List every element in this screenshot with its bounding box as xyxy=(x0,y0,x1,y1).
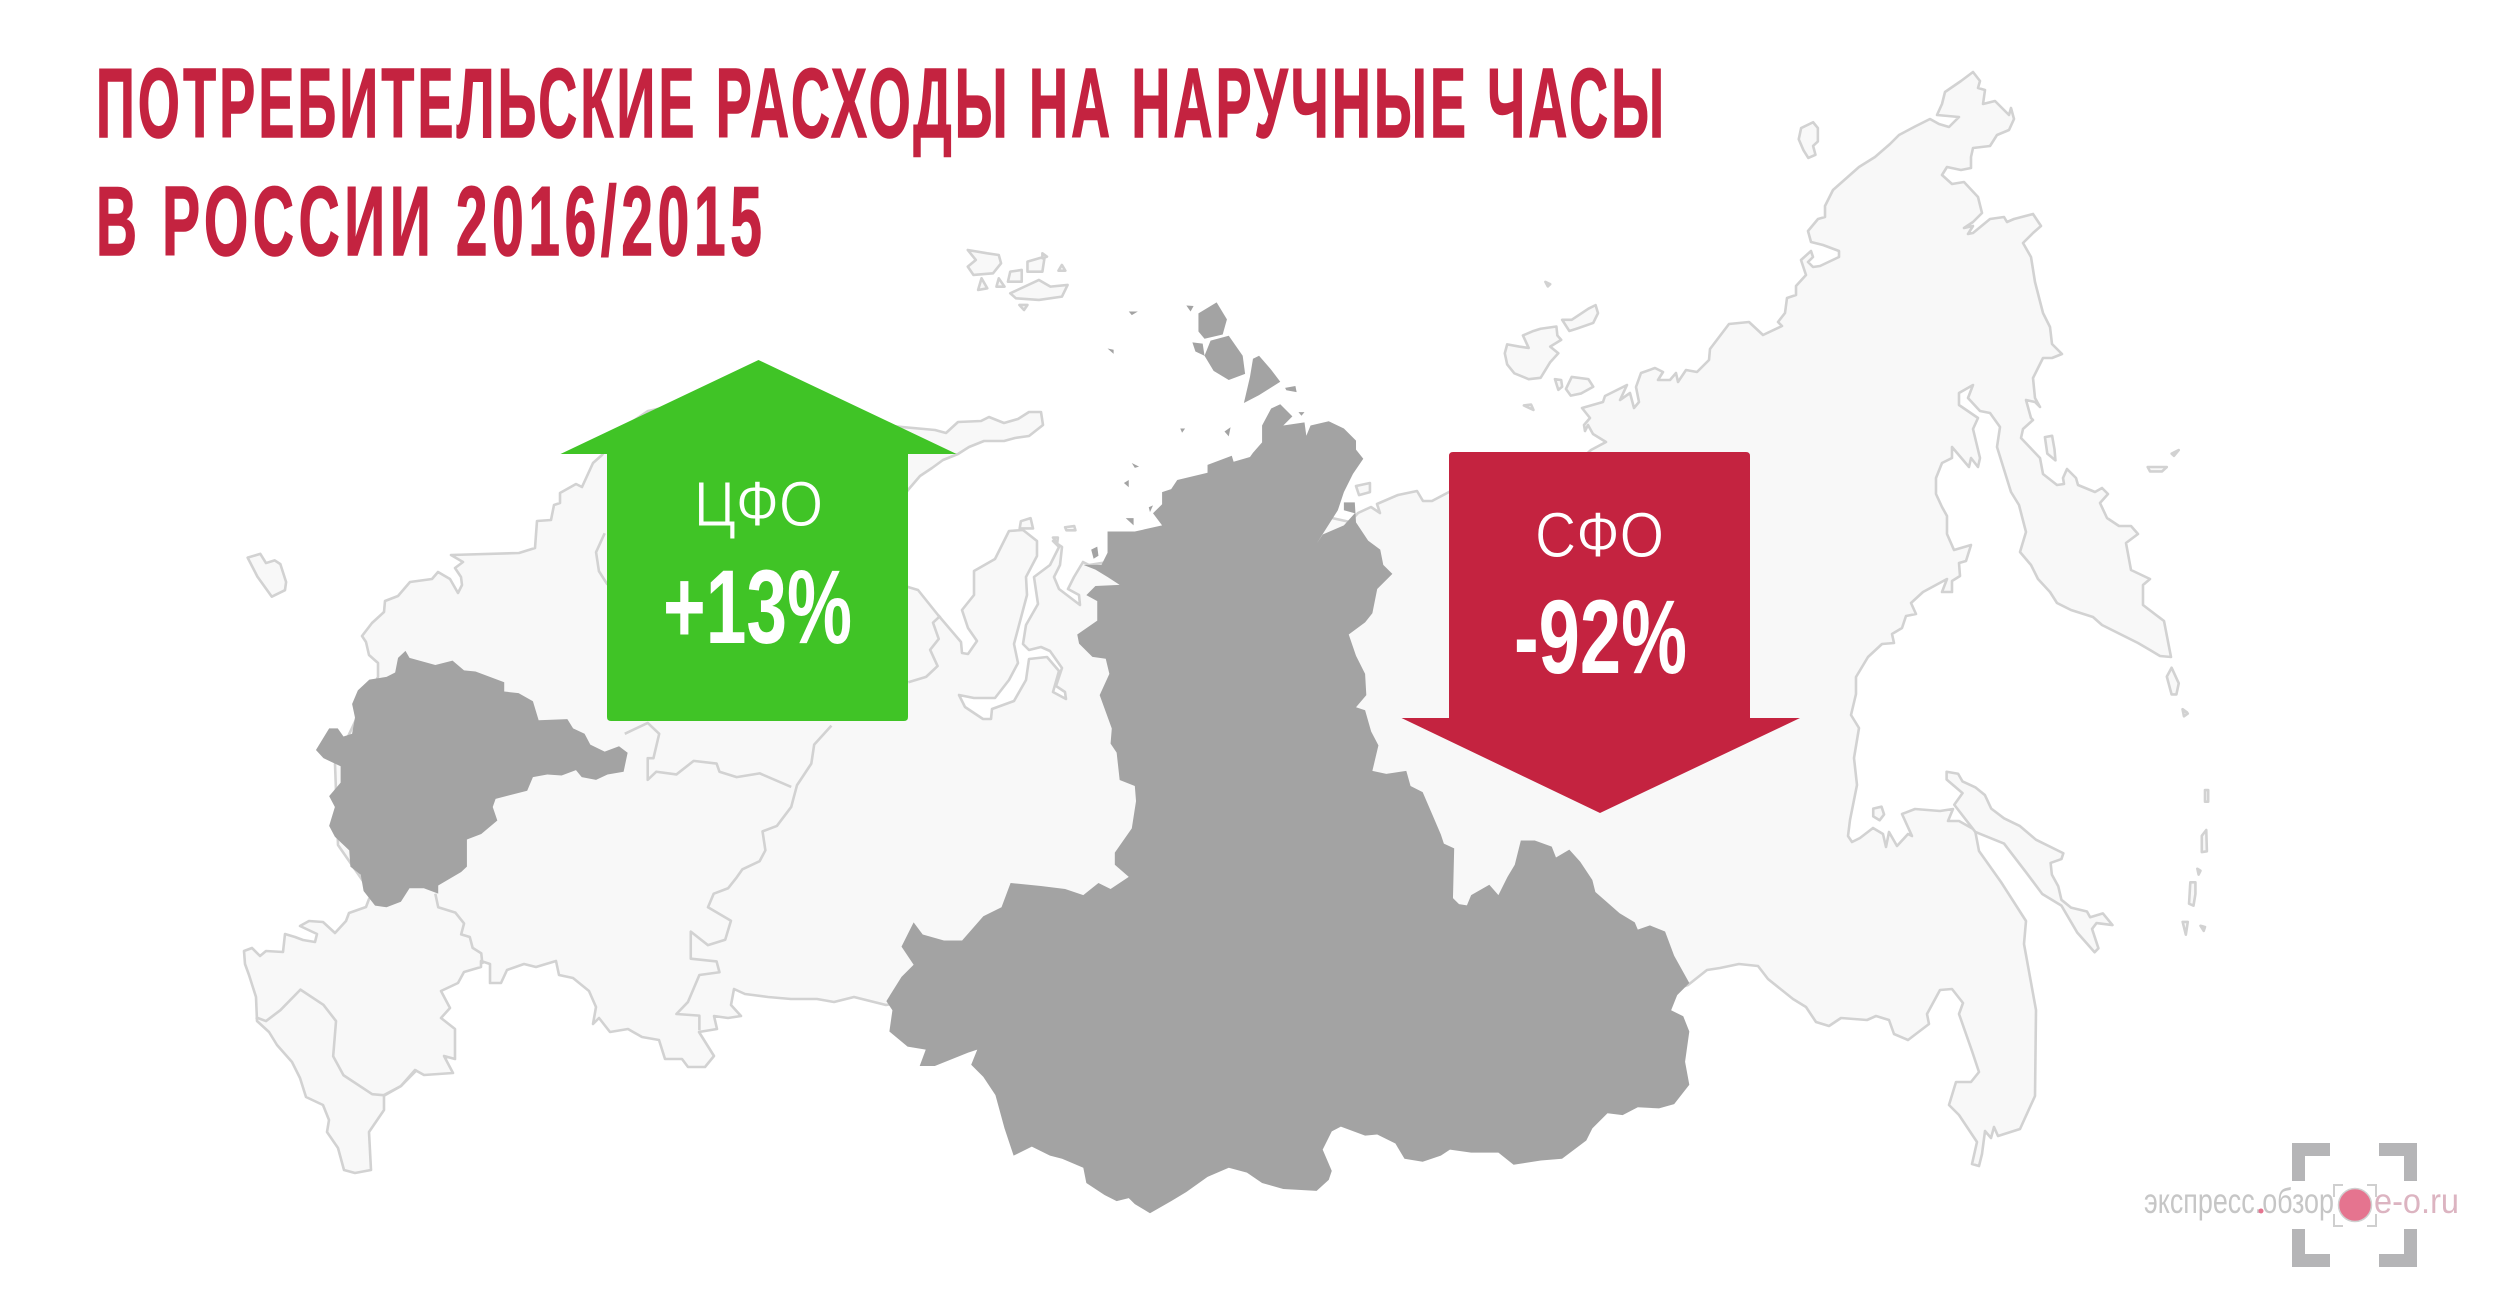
map: New Siberian, Wrangel and Commander islands xyxy=(1505,122,2187,715)
arrow down: Siberian Federal District -92%: -92% xyxy=(1514,579,1687,696)
map region: Central Federal District highlighted xyxy=(316,651,628,907)
map: Franz Josef Land islands xyxy=(968,250,1068,310)
title: В РОССИИ 2016/2015 xyxy=(96,166,762,276)
title: ПОТРЕБИТЕЛЬСКИЕ РАСХОДЫ НА НАРУЧНЫЕ ЧАСЫ xyxy=(96,48,1664,158)
title xyxy=(96,48,1664,276)
map: Sakhalin and Kuril islands xyxy=(1873,710,2208,952)
arrow up: Central Federal District +13%: +13% xyxy=(663,549,852,666)
logo: экспресс.обзор e-o.ru: экспресс.обзор xyxy=(2144,1182,2334,1221)
map: mainland Russia xyxy=(244,72,2171,1173)
map region: Siberian Federal District highlighted xyxy=(886,302,1689,1213)
logo: экспресс.обзор e-o.ru: e-o.ru xyxy=(2374,1182,2459,1221)
arrow down: Siberian Federal District -92% xyxy=(1402,452,1800,813)
arrow up: Central Federal District +13% xyxy=(560,360,957,721)
map: Kaliningrad exclave xyxy=(248,554,286,597)
arrow up: Central Federal District +13%: ЦФО xyxy=(694,468,823,540)
map: islands near Yamal and Taymyr xyxy=(1020,483,1370,543)
map: internal district borders xyxy=(256,533,940,1095)
arrow down: Siberian Federal District -92%: СФО xyxy=(1535,499,1664,571)
logo: экспресс.обзор e-o.ru xyxy=(2144,1143,2459,1267)
